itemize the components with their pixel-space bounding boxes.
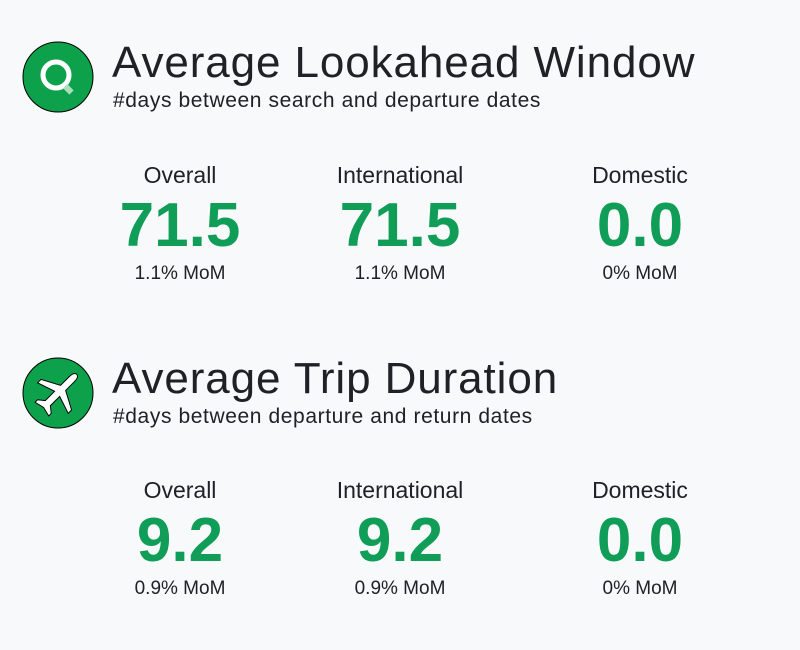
subtitle: lookahead: #days between search and departure dates: [113, 89, 541, 112]
stat: international: [337, 477, 463, 599]
stats: lookahead: [120, 162, 688, 284]
stat: domestic: [592, 162, 688, 284]
stats: trip duration: [135, 477, 688, 599]
stat: overall: Overall: [144, 162, 216, 188]
stat: domestic: 0% MoM: [603, 263, 677, 284]
stat: domestic: Domestic: [592, 162, 688, 188]
stat: international: 0.9% MoM: [355, 578, 445, 599]
stat: international: 71.5: [340, 191, 460, 260]
stat: overall: Overall: [144, 477, 216, 503]
stat: international: [337, 162, 463, 284]
stat: domestic: 0.0: [597, 191, 683, 260]
stat: overall: 9.2: [137, 506, 223, 575]
title: lookahead: Average Lookahead Window: [112, 38, 695, 87]
stat: international: 1.1% MoM: [355, 263, 445, 284]
stat: international: International: [337, 477, 463, 503]
stat: international: 9.2: [357, 506, 443, 575]
subtitle: trip duration: #days between departure and return dates: [113, 405, 533, 428]
stat: overall: 71.5: [120, 191, 240, 260]
icon: plane: [22, 358, 94, 428]
stat: domestic: [592, 477, 688, 599]
stat: overall: 0.9% MoM: [135, 578, 225, 599]
stat: overall: [120, 162, 240, 284]
icon: search: [22, 42, 94, 112]
stat: domestic: 0.0: [597, 506, 683, 575]
stat: domestic: 0% MoM: [603, 578, 677, 599]
stat: international: International: [337, 162, 463, 188]
title: trip duration: Average Trip Duration: [112, 354, 558, 403]
stat: domestic: Domestic: [592, 477, 688, 503]
stat: overall: [135, 477, 225, 599]
stat: overall: 1.1% MoM: [135, 263, 225, 284]
